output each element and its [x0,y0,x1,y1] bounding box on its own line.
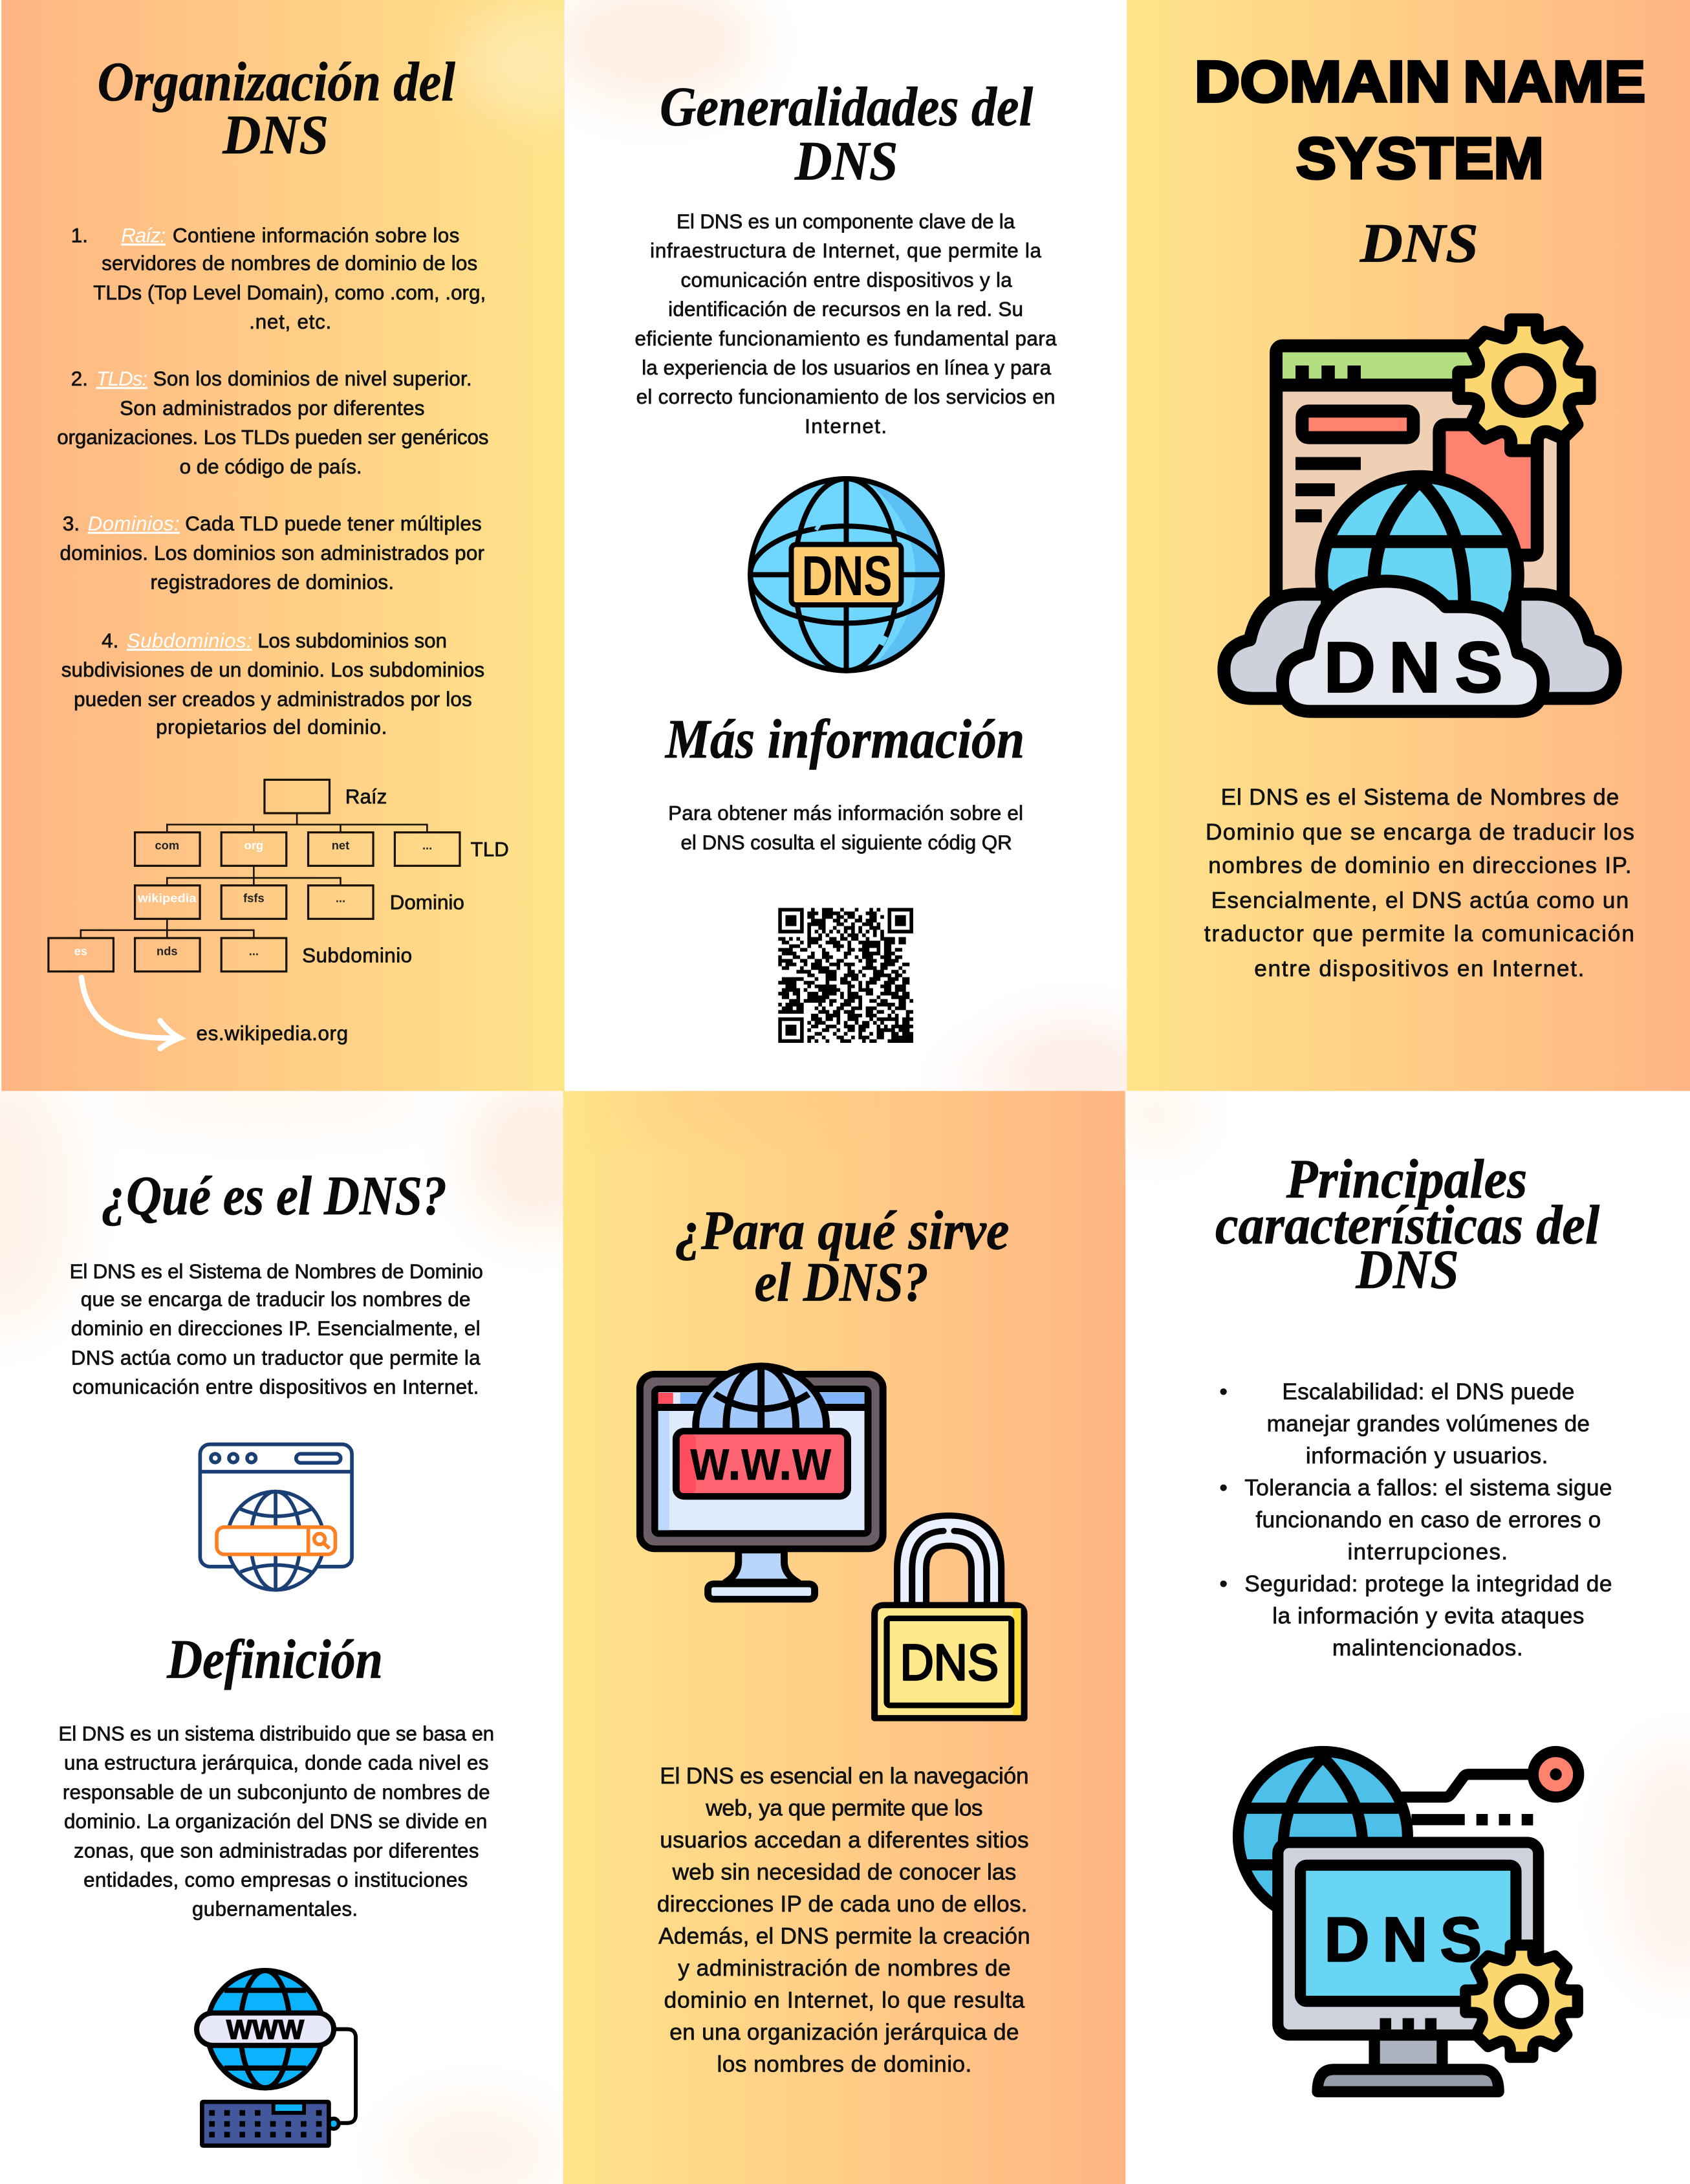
chart: DNS tree: TLD [471,838,509,861]
icon: DNS globe [750,479,942,671]
chart: DNS tree: org [244,838,263,852]
panel: ¿Para qué sirve el DNS? [563,1072,1125,2184]
list: features: información y usuarios. [1306,1443,1548,1469]
icon: browser globe search [200,1445,352,1590]
text: what is DNS: dominio en direcciones IP. Esencialmente, el [71,1317,481,1340]
text: definition: El DNS es el Sistema de Nombres de [1221,785,1619,810]
list: features: manejar grandes volúmenes de [1267,1412,1590,1437]
icon: WWW globe and keyboard: WWW [226,2015,305,2045]
panel: Organización del DNS [1,0,599,1091]
icon: WWW monitor and DNS padlock: w.w.w [689,1427,831,1492]
list: features: la información y evita ataques [1272,1604,1584,1629]
text: purpose: El DNS es esencial en la navegación [660,1764,1029,1789]
text: definition: Dominio que se encarga de traducir los [1206,820,1634,845]
text: hierarchy list: Dominios: [88,512,180,535]
text: definition detail: responsable de un subconjunto de nombres de [63,1781,490,1804]
text: hierarchy list: propietarios del dominio. [156,715,387,738]
text: what is DNS [70,1260,483,1399]
text: purpose: direcciones IP de cada uno de ellos. [657,1892,1027,1917]
icon: DNS cloud window with gear: DNS [1324,628,1502,707]
text: definition detail [58,1722,494,1921]
text: definition detail: El DNS es un sistema distribuido que se basa en [58,1722,494,1745]
list: features: funcionando en caso de errores o [1255,1507,1601,1533]
text: definition: traductor que permite la comunicación [1204,921,1634,946]
heading: Principales características del DNS: DNS [1355,1238,1459,1300]
chart: DNS tree: es [74,945,87,958]
icon: WWW monitor and DNS padlock: DNS [900,1635,999,1691]
heading: Generalidades del DNS: Generalidades del [660,76,1033,138]
chart: DNS tree: wikipedia [137,891,197,905]
chart: DNS tree: Dominio [390,891,464,914]
list: features: interrupciones. [1348,1540,1508,1565]
text: hierarchy list: 3. [63,512,80,535]
text: definition detail: zonas, que son administradas por diferentes [74,1839,479,1862]
text: overview: el correcto funcionamiento de los servicios en [636,386,1056,408]
text: definition: Esencialmente, el DNS actúa como un [1211,888,1629,913]
text: hierarchy list: 1. [71,224,88,247]
panel: Principales características [1114,1079,1690,2091]
text: overview: comunicación entre dispositivos y la [681,268,1012,291]
list: features: • [1219,1571,1228,1597]
heading: Principales características del DNS: Principales [1286,1148,1527,1210]
text: hierarchy list: Son los dominios de nivel superior. [153,367,472,390]
heading: Organización del DNS: Organización del [98,50,455,113]
text: definition: nombres de dominio en direcciones IP. [1208,853,1632,879]
text: purpose: web sin necesidad de conocer las [672,1860,1016,1885]
text: what is DNS: comunicación entre dispositivos en Internet. [72,1376,479,1399]
text: QR prompt [668,802,1023,854]
text: what is DNS: El DNS es el Sistema de Nombres de Dominio [70,1260,483,1283]
text: purpose: web, ya que permite que los [705,1796,983,1821]
text: hierarchy list: Contiene información sobre los [173,224,459,247]
text: purpose: y administración de nombres de [678,1956,1011,1981]
icon: DNS globe: DNS [801,544,892,607]
icon: DNS monitor with globe and gear: DNS [1324,1905,1482,1975]
chart: DNS tree: ... [422,838,432,852]
list: features: malintencionados. [1332,1635,1523,1661]
text: definition detail: una estructura jerárquica, donde cada nivel es [64,1752,488,1774]
chart: DNS tree: es.wikipedia.org [196,1022,348,1045]
list: features [1219,1379,1612,1661]
text: hierarchy list: Los subdominios son [257,629,447,652]
text: hierarchy list: Son administrados por diferentes [120,397,424,419]
icon: WWW monitor and DNS padlock [640,1366,1024,1718]
panel: Domain Name System cover [1127,0,1690,1091]
text: overview: infraestructura de Internet, que permite la [650,239,1042,262]
text: hierarchy list: Raíz: [121,224,166,247]
text: definition detail: gubernamentales. [192,1898,358,1921]
chart: DNS tree: net [332,838,349,852]
title [1195,49,1645,191]
text: purpose: los nombres de dominio. [717,2052,971,2077]
text: overview: Internet. [805,415,887,437]
heading: Generalidades del DNS: DNS [794,130,898,192]
title: SYSTEM [1296,126,1544,191]
heading: Organización del DNS: DNS [222,104,329,166]
icon: DNS monitor with globe and gear [1239,1752,1579,2091]
text: hierarchy list: o de código de país. [180,455,362,478]
text: definition detail: entidades, como empresas o instituciones [83,1868,468,1891]
heading: Generalidades del DNS [660,76,1033,192]
text: purpose [657,1764,1030,2077]
chart: DNS tree: Subdominio [302,944,412,966]
heading: Más información: Más información [664,708,1024,770]
text: hierarchy list: pueden ser creados y administrados por los [74,688,472,710]
text: purpose: dominio en Internet, lo que resulta [664,1988,1025,2013]
chart: DNS tree: fsfs [243,891,265,905]
list: features: • [1219,1379,1228,1404]
text: hierarchy list: servidores de nombres de dominio de los [102,252,477,275]
heading: ¿Para qué sirve el DNS?: el DNS? [755,1250,929,1313]
heading: ¿Para qué sirve el DNS?: ¿Para qué sirve [675,1199,1009,1261]
text: purpose: en una organización jerárquica de [669,2020,1019,2045]
list: features: Seguridad: protege la integridad de [1244,1571,1612,1597]
text: hierarchy list: 4. [102,629,118,652]
text: hierarchy list: subdivisiones de un dominio. Los subdominios [61,659,484,681]
text: definition [1204,785,1634,981]
text: overview [634,210,1057,437]
chart: DNS tree: nds [157,945,178,958]
text: overview: identificación de recursos en la red. Su [668,298,1023,321]
panel: Generalidades del DNS [550,0,1155,1121]
text: hierarchy list: Subdominios: [127,629,252,652]
text: hierarchy list: TLDs (Top Level Domain), como .com, .org, [93,281,486,304]
text: QR prompt: el DNS cosulta el siguiente códig QR [681,831,1012,854]
heading: Principales características del DNS [1215,1148,1599,1300]
title: NAME [1463,49,1645,115]
heading: Organización del DNS [98,50,455,166]
list: features: Tolerancia a fallos: el sistema sigue [1244,1476,1612,1501]
icon: DNS cloud window with gear [1224,320,1616,712]
text: hierarchy list: organizaciones. Los TLDs pueden ser genéricos [57,426,488,449]
text: hierarchy list: 2. [71,367,88,390]
text: hierarchy list: Cada TLD puede tener múltiples [185,512,482,535]
icon: WWW globe and keyboard [197,1971,356,2146]
chart: DNS tree: ... [249,945,259,958]
heading: ¿Qué es el DNS?: ¿Qué es el DNS? [102,1164,447,1227]
heading: DNS: DNS [1360,212,1479,274]
chart: DNS tree: Raíz [345,785,387,808]
text: QR prompt: Para obtener más información sobre el [668,802,1023,825]
text: hierarchy list: registradores de dominios. [150,571,394,593]
heading: ¿Para qué sirve el DNS? [675,1199,1009,1313]
title: DOMAIN [1195,49,1451,115]
heading: Principales características del DNS: características del [1215,1194,1599,1256]
text: definition detail: dominio. La organización del DNS se divide en [64,1810,487,1833]
text: hierarchy list [57,224,488,738]
heading: Definición: Definición [166,1628,383,1690]
text: overview: eficiente funcionamiento es fundamental para [634,327,1057,350]
arrow [81,977,180,1049]
list: features: • [1219,1476,1228,1501]
text: overview: El DNS es un componente clave de la [677,210,1015,233]
text: what is DNS: DNS actúa como un traductor que permite la [71,1346,481,1369]
text: purpose: Además, el DNS permite la creación [658,1924,1030,1949]
text: overview: la experiencia de los usuarios en línea y para [642,356,1052,379]
QR code [778,908,913,1043]
text: purpose: usuarios accedan a diferentes sitios [660,1828,1029,1853]
text: definition: entre dispositivos en Internet. [1254,956,1584,981]
panel: ¿Qué es el DNS? [0,1065,605,2184]
chart: DNS tree [49,780,509,1049]
text: hierarchy list: .net, etc. [249,311,331,333]
chart: DNS tree: ... [336,891,345,905]
chart: DNS tree: com [155,838,179,852]
text: hierarchy list: dominios. Los dominios son administrados por [60,541,484,564]
list: features: Escalabilidad: el DNS puede [1282,1379,1574,1404]
text: what is DNS: que se encarga de traducir los nombres de [81,1288,471,1311]
text: hierarchy list: TLDs: [96,367,147,390]
